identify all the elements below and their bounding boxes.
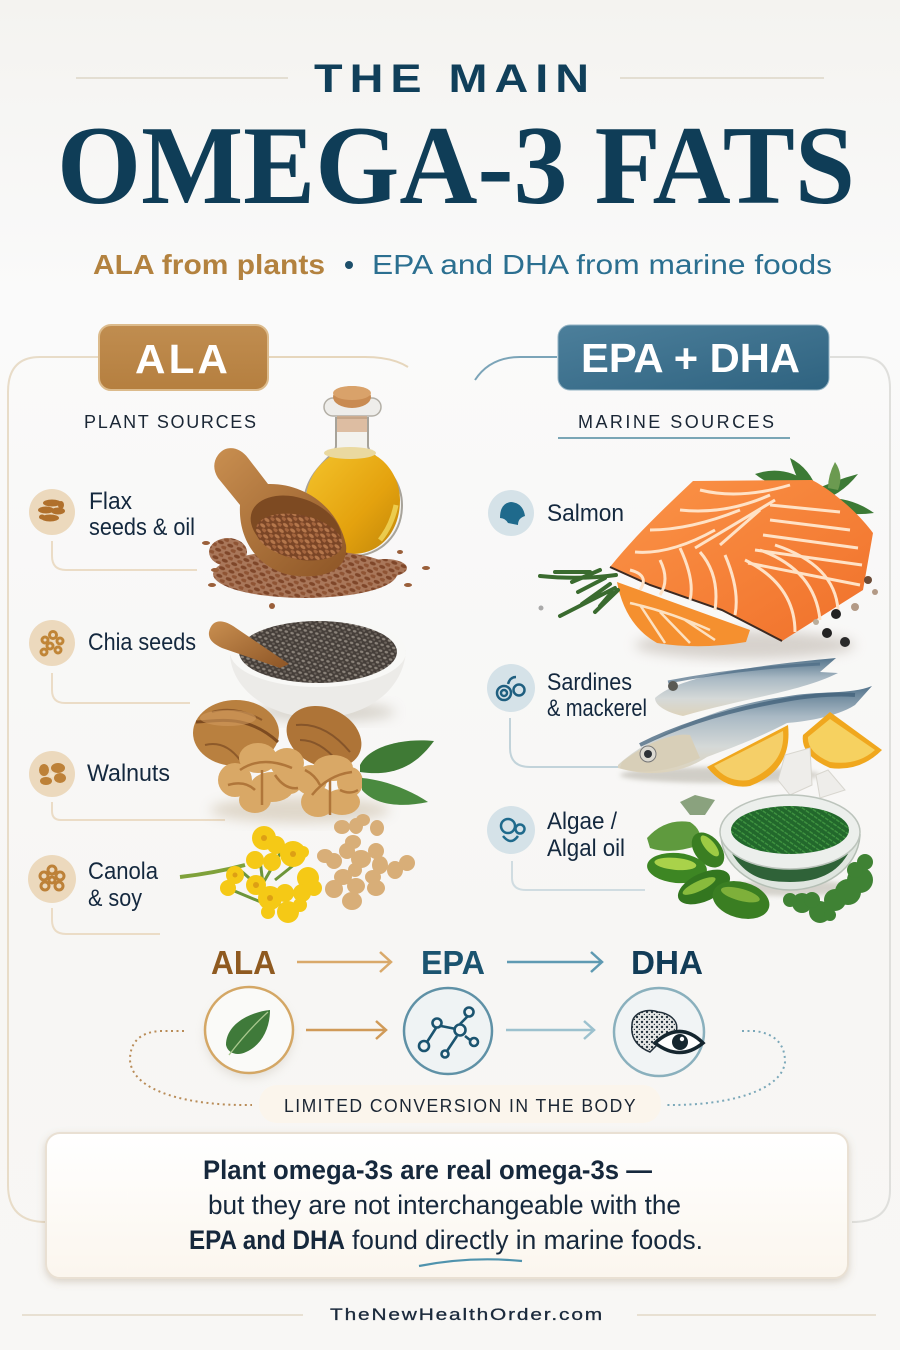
icon: sardines	[497, 677, 524, 700]
dotted loop left	[130, 1031, 252, 1105]
illustration: salmon fillet	[610, 480, 873, 659]
callout: limited conversion: LIMITED CONVERSION IN THE BODY	[284, 1096, 637, 1116]
badge: EPA + DHA: EPA + DHA	[581, 335, 800, 381]
icon: leaf circle	[205, 987, 293, 1076]
badge: EPA + DHA	[558, 325, 829, 390]
arrow: ALA to EPA top	[297, 952, 391, 972]
subheading: marine sources: MARINE SOURCES	[578, 412, 774, 432]
illustration: rosemary sprig	[540, 570, 618, 616]
badge: ALA	[99, 325, 268, 390]
takeaway text: found directly in marine foods.	[352, 1225, 703, 1255]
arrow: leaf to molecule	[306, 1021, 386, 1039]
item: walnuts: Walnuts	[87, 760, 170, 787]
takeaway text	[189, 1155, 703, 1255]
item: walnuts	[29, 751, 225, 820]
illustration: flax seed pile and scoop	[202, 448, 430, 609]
label: EPA: EPA	[421, 944, 485, 981]
icon: walnut	[39, 763, 66, 785]
illustration: sardines	[618, 658, 872, 783]
icon: salmon	[500, 502, 525, 525]
item: canola and soy: Canola	[88, 858, 159, 885]
panel: EPA + DHA	[475, 325, 890, 1222]
item: flax: seeds & oil	[89, 514, 195, 541]
icon: chia seeds	[41, 632, 63, 655]
illustration: herb sprig top	[755, 458, 874, 514]
takeaway box	[46, 1133, 848, 1278]
eyebrow title: THE MAIN	[314, 57, 596, 101]
illustration: soybeans	[317, 814, 415, 910]
illustration: peppercorns	[538, 576, 878, 647]
item: algae	[487, 806, 645, 890]
illustration: algae bowl	[680, 795, 860, 896]
center divider	[449, 337, 451, 925]
item: canola and soy: & soy	[88, 885, 142, 912]
icon: algae	[501, 819, 524, 841]
item: sardines and mackerel	[487, 664, 647, 767]
subtitle: EPA and DHA from marine foods	[372, 249, 832, 280]
icon: molecule circle	[404, 988, 492, 1074]
illustration: walnuts	[193, 694, 434, 823]
illustration: parsley	[783, 854, 873, 923]
subheading: plant sources: PLANT SOURCES	[84, 412, 256, 432]
takeaway text: but they are not interchangeable with the	[208, 1190, 681, 1220]
illustration: algal oil capsules	[646, 821, 774, 925]
dotted loop right	[665, 1031, 785, 1105]
icon: brain and eye circle	[614, 988, 704, 1076]
subtitle: ALA from plants	[93, 249, 325, 280]
illustration: chia seed bowl	[209, 617, 406, 722]
website: TheNewHealthOrder.com	[330, 1305, 604, 1324]
label: ALA: ALA	[211, 944, 276, 981]
takeaway text: EPA and DHA	[189, 1225, 345, 1255]
page header	[57, 57, 855, 280]
arrow: EPA to DHA top	[507, 952, 602, 972]
item: chia	[29, 620, 196, 703]
item: canola and soy	[28, 855, 160, 934]
item: salmon	[488, 490, 624, 536]
item: algae: Algae /	[547, 808, 617, 835]
illustration: flaxseed oil bottle	[304, 386, 402, 556]
item: salmon: Salmon	[547, 500, 624, 527]
item: chia: Chia seeds	[88, 629, 196, 656]
label: DHA: DHA	[631, 944, 703, 981]
subtitle	[93, 249, 832, 280]
illustration: lemon wedges	[707, 712, 882, 787]
panel: ALA	[8, 325, 434, 1222]
item: sardines and mackerel: Sardines	[547, 669, 632, 696]
illustration: ice	[778, 748, 845, 798]
underline squiggle	[419, 1259, 522, 1266]
item: flax: Flax	[89, 488, 132, 515]
takeaway text: Plant omega-3s are real omega-3s —	[203, 1155, 652, 1185]
icon: canola flower	[40, 866, 64, 890]
illustration: canola flowers	[180, 826, 322, 923]
main title: OMEGA-3 FATS	[57, 104, 855, 228]
leaves	[360, 740, 434, 805]
icon: flax seeds	[38, 500, 65, 522]
item: flax	[29, 488, 197, 570]
callout: limited conversion	[259, 1085, 661, 1123]
item: algae: Algal oil	[547, 835, 625, 862]
badge: ALA: ALA	[135, 336, 231, 382]
item: sardines and mackerel: & mackerel	[547, 695, 647, 722]
conversion pathway	[130, 944, 785, 1123]
arrow: molecule to brain	[506, 1021, 594, 1039]
